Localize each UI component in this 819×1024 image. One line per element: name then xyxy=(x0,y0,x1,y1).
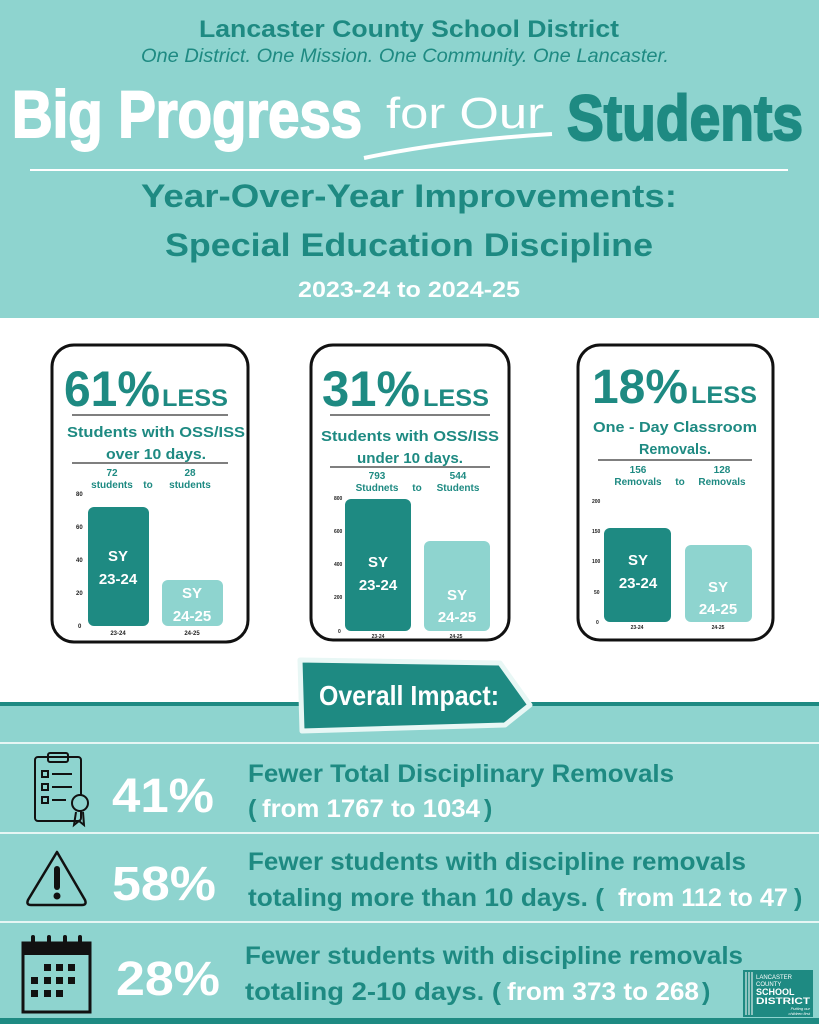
card 1: SY xyxy=(182,585,202,602)
card 1: 61% xyxy=(64,361,160,417)
card 3: 18% xyxy=(592,361,688,414)
card 3: 156 xyxy=(630,465,647,476)
row 2: ) xyxy=(794,884,802,912)
card 1: 72 xyxy=(106,468,118,479)
card 2: Studnets xyxy=(356,483,399,494)
card 1: 60 xyxy=(76,525,83,531)
card 3: 23-24 xyxy=(619,575,658,592)
headline xyxy=(12,77,803,158)
card 3: 200 xyxy=(592,499,601,505)
card 3: Removals xyxy=(614,477,662,488)
row 2: 58% xyxy=(112,858,216,911)
card 2: Students xyxy=(437,483,480,494)
card 3: 23-24 xyxy=(631,625,644,631)
logo: COUNTY xyxy=(756,982,781,988)
card 2: 31% xyxy=(322,361,420,417)
logo: children first xyxy=(788,1011,811,1016)
card 2: 600 xyxy=(334,529,343,535)
row 3: 28% xyxy=(116,953,220,1006)
header band xyxy=(0,0,819,318)
card 1 xyxy=(52,345,248,642)
card 3: One - Day Classroom xyxy=(593,419,757,436)
card 2: 544 xyxy=(450,471,467,482)
card 2: LESS xyxy=(423,385,489,412)
row 3: Fewer students with discipline removals xyxy=(245,942,743,970)
row 1: 41% xyxy=(112,770,214,823)
card 1: students xyxy=(169,480,211,491)
card 3: to xyxy=(675,477,685,488)
row 2: Fewer students with discipline removals xyxy=(248,848,746,876)
logo: Putting our xyxy=(791,1006,811,1011)
card 1: 24-25 xyxy=(173,608,211,625)
overall impact tab xyxy=(300,660,530,731)
card 2: 200 xyxy=(334,595,343,601)
card 2: Students with OSS/ISS xyxy=(321,428,499,445)
card 3: 128 xyxy=(714,465,731,476)
row 3: ) xyxy=(702,978,710,1006)
card 2: 23-24 xyxy=(372,634,385,640)
headline: for Our xyxy=(386,89,544,138)
card 3: SY xyxy=(708,579,728,596)
card 3: 50 xyxy=(594,590,600,596)
date range: 2023-24 to 2024-25 xyxy=(298,277,520,302)
card 2: 24-25 xyxy=(450,634,463,640)
row 3: totaling 2-10 days. ( xyxy=(245,978,502,1006)
card 1: Students with OSS/ISS xyxy=(67,424,245,441)
card 1: 40 xyxy=(76,558,83,564)
card 1: 20 xyxy=(76,591,83,597)
card 3 xyxy=(578,345,773,640)
card 1: 24-25 xyxy=(184,631,200,637)
logo: SCHOOL xyxy=(756,987,795,997)
row 3 xyxy=(23,935,743,1012)
card 1: 0 xyxy=(78,624,82,630)
card 2: 800 xyxy=(334,496,343,502)
row 1 xyxy=(35,753,674,825)
row 2: totaling more than 10 days. ( xyxy=(248,884,605,912)
bottom band xyxy=(0,704,819,1024)
logo: DISTRICT xyxy=(756,996,811,1006)
card 1: to xyxy=(143,480,153,491)
card 3: 24-25 xyxy=(712,625,725,631)
card 1: students xyxy=(91,480,133,491)
subtitle heading: Year-Over-Year Improvements: xyxy=(141,178,677,214)
card 1: SY xyxy=(108,548,128,565)
subtitle heading: Special Education Discipline xyxy=(165,227,653,263)
card 1: 23-24 xyxy=(99,571,138,588)
subtitle heading xyxy=(141,178,677,263)
row 1: from 1767 to 1034 xyxy=(262,795,480,823)
row 2: from 112 to 47 xyxy=(618,884,788,912)
card 1: 23-24 xyxy=(110,631,126,637)
card 2: 23-24 xyxy=(359,577,398,594)
card 2: to xyxy=(412,483,422,494)
row 1: ( xyxy=(248,795,257,823)
row 1: ) xyxy=(484,795,492,823)
card 3: LESS xyxy=(691,382,757,409)
card 3: 100 xyxy=(592,559,601,565)
card 3: Removals xyxy=(698,477,746,488)
overall impact tab: Overall Impact: xyxy=(319,680,499,711)
card 1: LESS xyxy=(162,385,228,412)
card 2 xyxy=(311,345,509,640)
icon: calendar xyxy=(23,935,90,1012)
card 2: SY xyxy=(447,587,467,604)
icon: clipboard xyxy=(35,753,88,825)
card 3: 0 xyxy=(596,620,599,626)
logo: LANCASTER xyxy=(756,975,793,981)
row 1: Fewer Total Disciplinary Removals xyxy=(248,760,674,788)
row 2 xyxy=(27,848,802,912)
headline: Big Progress xyxy=(12,77,362,151)
card 3: 24-25 xyxy=(699,601,737,618)
card 2: 400 xyxy=(334,562,343,568)
tagline: One District. One Mission. One Community. One Lancaster. xyxy=(141,46,669,67)
card 3: Removals. xyxy=(639,441,711,458)
card 3: SY xyxy=(628,552,648,569)
card 1: 28 xyxy=(184,468,196,479)
card 2: under 10 days. xyxy=(357,450,463,467)
icon: warning xyxy=(27,852,86,905)
card 1: over 10 days. xyxy=(106,446,206,463)
card 2: 793 xyxy=(369,471,386,482)
card 2: 0 xyxy=(338,629,341,635)
card 1: 80 xyxy=(76,492,83,498)
row 3: from 373 to 268 xyxy=(507,978,699,1006)
district name: Lancaster County School District xyxy=(199,16,619,43)
card 3: 150 xyxy=(592,529,601,535)
card 2: 24-25 xyxy=(438,609,476,626)
card 2: SY xyxy=(368,554,388,571)
logo xyxy=(743,970,813,1017)
